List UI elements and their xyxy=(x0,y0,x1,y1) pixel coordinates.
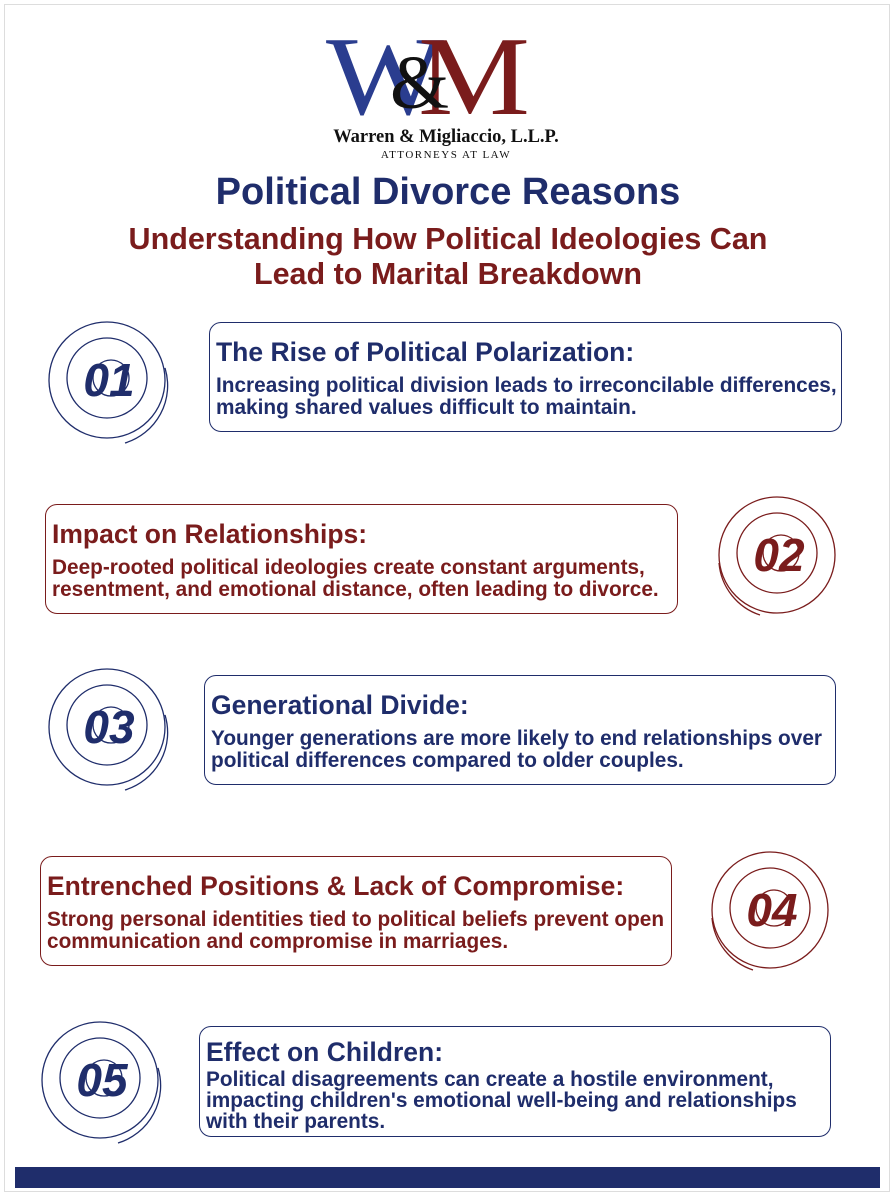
icon: 04: 04 xyxy=(746,884,798,936)
logo xyxy=(326,22,559,161)
icon: 03: 03 xyxy=(83,701,135,753)
icon: 02 xyxy=(718,496,836,616)
icon: 03 xyxy=(48,668,168,791)
panel 3: Generational Divide: xyxy=(211,690,469,720)
panel 3: Younger generations are more likely to end relationships over political differences compared to older couples. xyxy=(211,727,822,772)
panel 5: Effect on Children: xyxy=(206,1037,443,1067)
subtitle: Lead to Marital Breakdown xyxy=(254,257,642,291)
panel 5: Political disagreements can create a hostile environment, impacting children's emotional well-being and relationships with their parents. xyxy=(206,1068,797,1133)
panel 1: The Rise of Political Polarization: xyxy=(216,337,634,367)
panel 2: Impact on Relationships: xyxy=(52,519,367,549)
panel 2 xyxy=(45,504,678,614)
icon: 05 xyxy=(41,1021,162,1144)
panel 1 xyxy=(209,322,842,432)
footer bar xyxy=(15,1167,880,1188)
logo: & xyxy=(390,41,449,125)
icon: 01 xyxy=(48,321,168,444)
logo: ATTORNEYS AT LAW xyxy=(381,149,511,161)
icon: 02: 02 xyxy=(753,529,805,581)
logo: Warren & Migliaccio, L.L.P. xyxy=(333,127,559,147)
panel 3 xyxy=(204,675,836,785)
panel 4: Strong personal identities tied to political beliefs prevent open communication and compromise in marriages. xyxy=(47,908,664,953)
subtitle xyxy=(129,222,767,291)
title: Political Divorce Reasons xyxy=(216,171,680,213)
panel 5 xyxy=(199,1026,831,1137)
subtitle: Understanding How Political Ideologies Can xyxy=(129,222,767,256)
icon: 01: 01 xyxy=(83,354,135,406)
panel 2: Deep-rooted political ideologies create constant arguments, resentment, and emotional distance, often leading to divorce. xyxy=(52,556,659,601)
panel 4: Entrenched Positions & Lack of Compromise: xyxy=(47,871,624,901)
icon: 05: 05 xyxy=(76,1054,129,1106)
panel 1: Increasing political division leads to irreconcilable differences, making shared values difficult to maintain. xyxy=(216,374,837,419)
icon: 04 xyxy=(711,851,829,971)
panel 4 xyxy=(40,856,672,966)
